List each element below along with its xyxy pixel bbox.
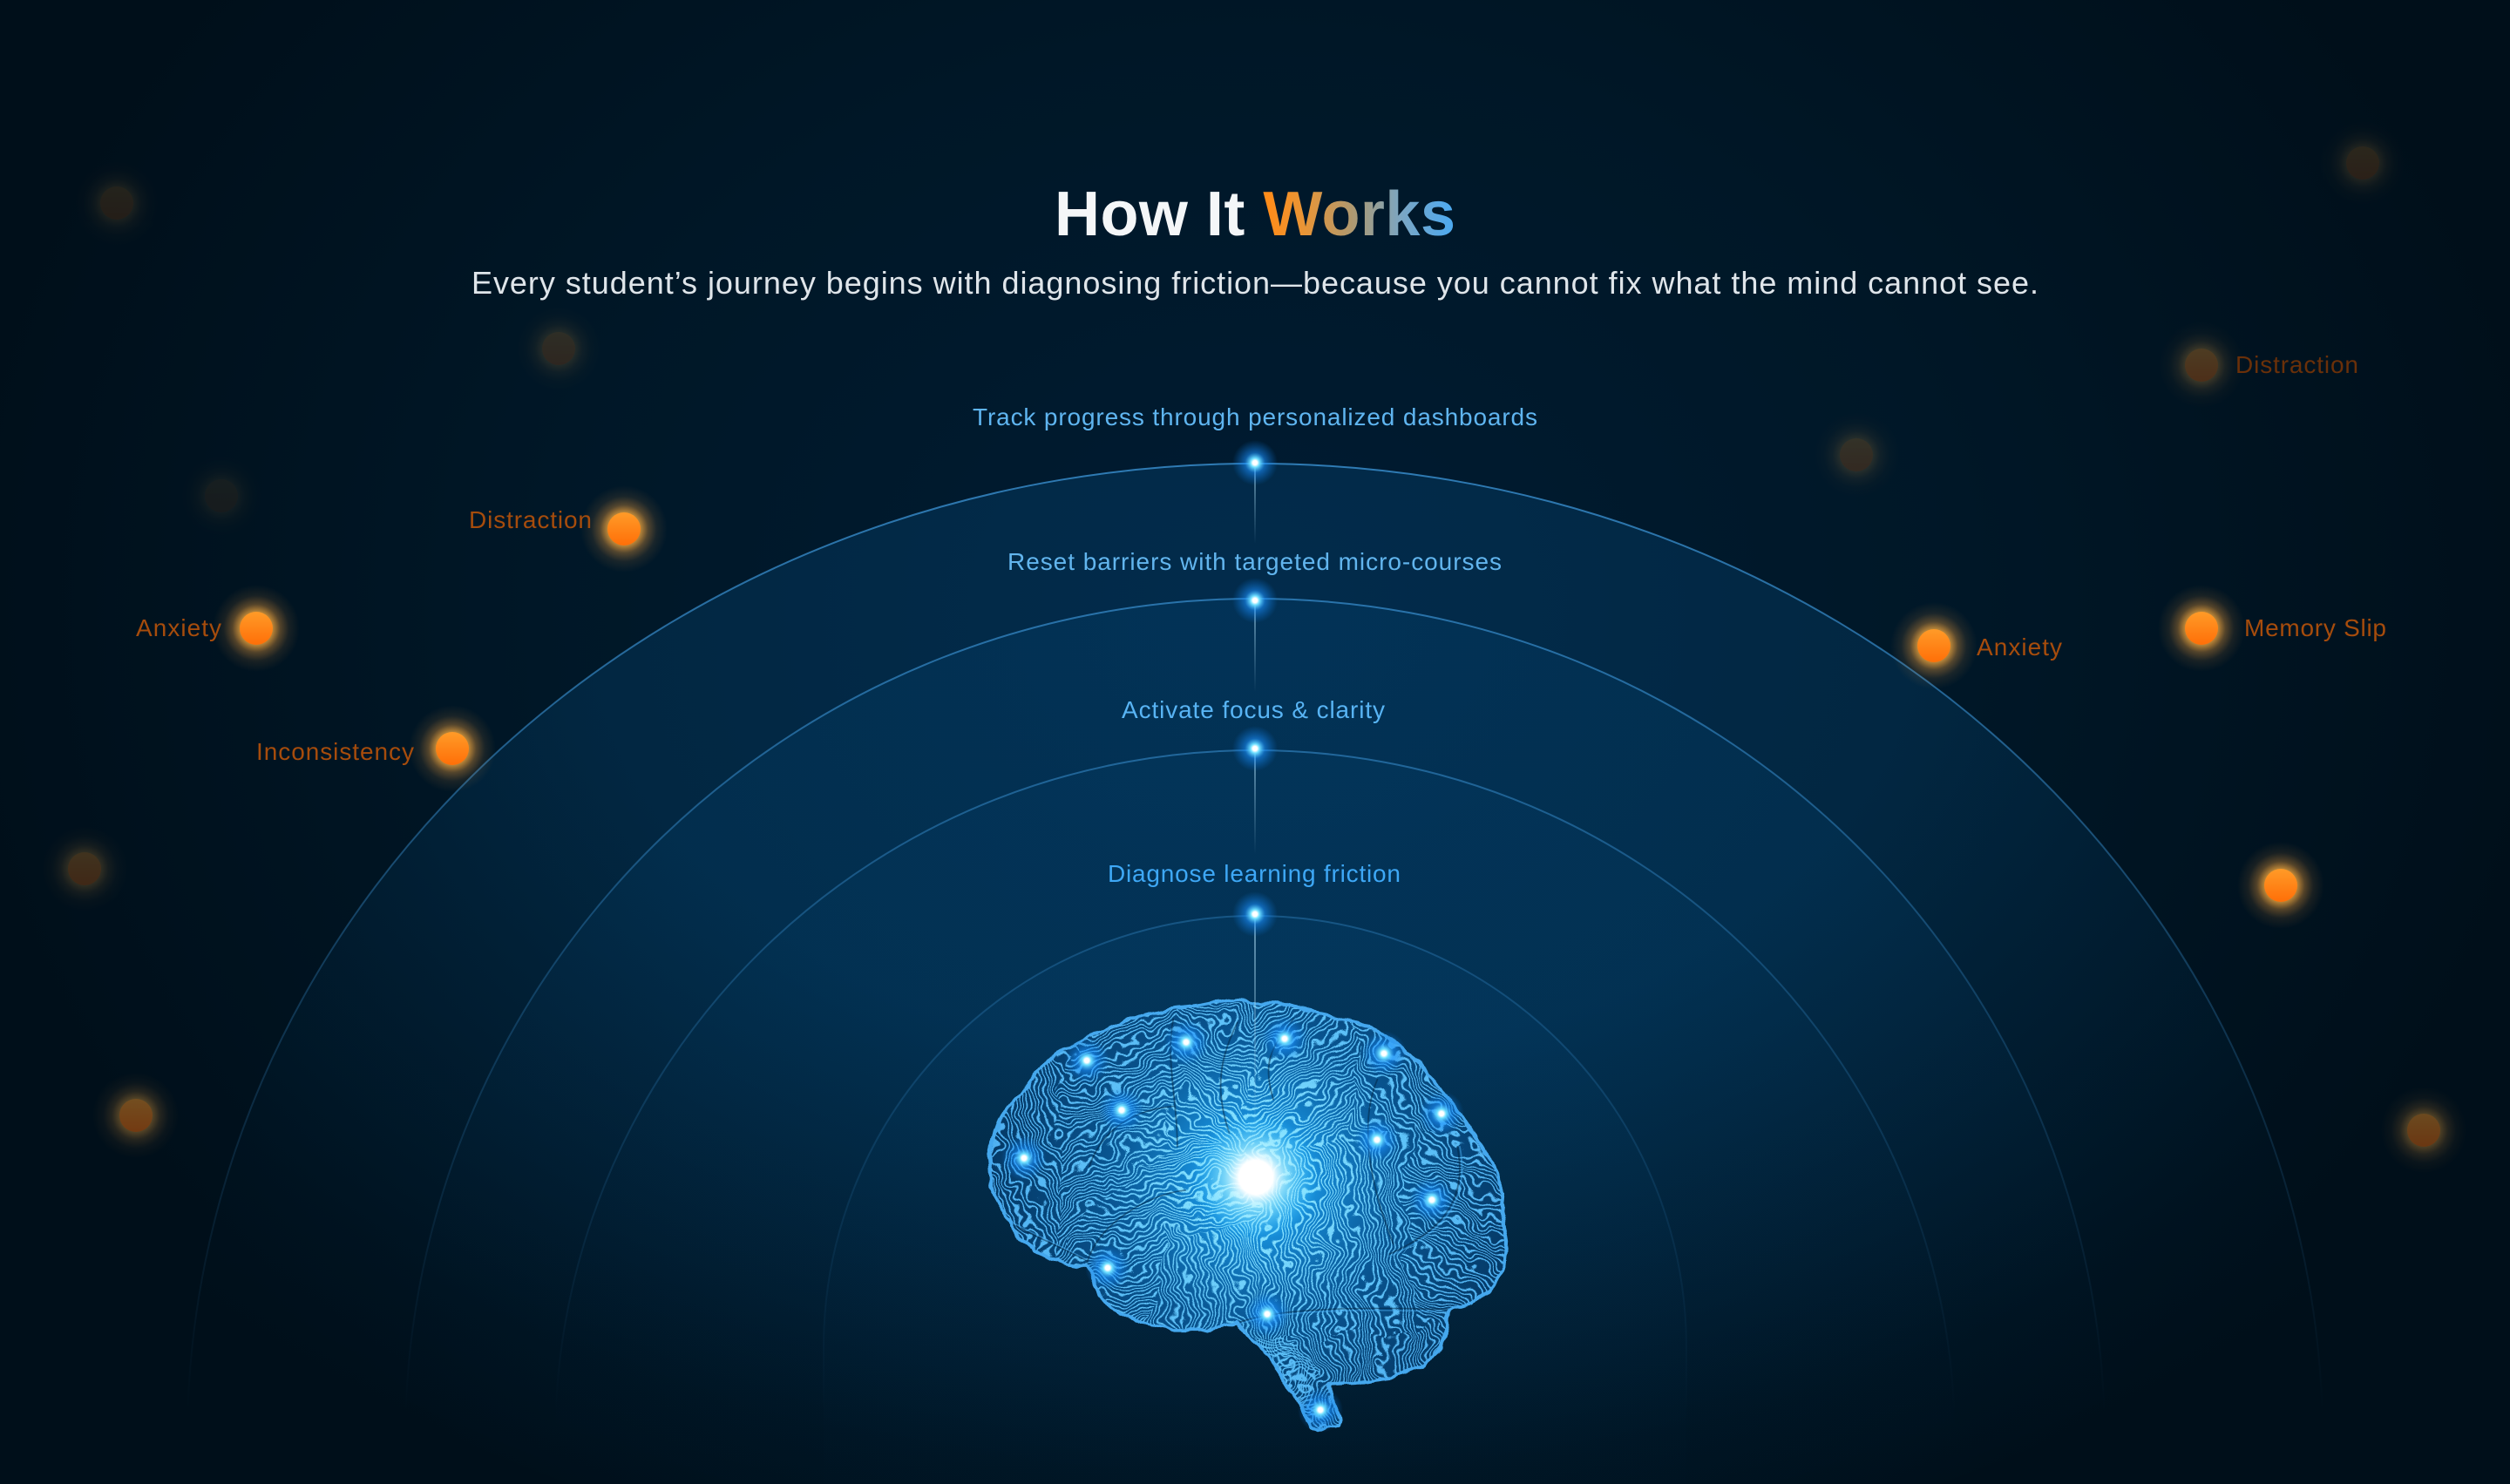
brain: line texture and glow — [991, 1000, 1505, 1429]
brain: glowing nodes — [1001, 1016, 1464, 1433]
arc: outer ring (dashboards) — [187, 464, 2323, 1484]
friction dot: Inconsistency: Inconsistency — [256, 738, 414, 765]
brain: bright core — [1193, 1115, 1319, 1240]
arc: ring (micro-courses) — [405, 599, 2105, 1484]
friction dot: Anxiety right — [1890, 602, 2062, 689]
arc: inner ring (diagnose) — [824, 916, 1686, 1484]
friction dot: Distraction left: Distraction — [469, 506, 592, 533]
brain illustration — [987, 998, 1509, 1433]
brain: rim — [989, 999, 1508, 1430]
connector: dashboards to micro-courses — [1254, 464, 1256, 544]
friction dot: Distraction left — [469, 485, 668, 573]
friction dot: Anxiety left — [136, 585, 300, 672]
friction dot: Inconsistency — [256, 705, 496, 792]
friction dot: faint left — [41, 825, 128, 912]
subtitle: Every student’s journey begins with diagnosing friction—because you cannot fix what the mind cannot see. — [471, 265, 2039, 301]
friction dot: unlabeled mid right — [2380, 1087, 2467, 1174]
friction dot: faint upper right — [1813, 411, 1900, 498]
step 2 node and label: Activate focus & clarity — [1122, 696, 1385, 723]
arc: ring (focus and clarity) — [555, 750, 1955, 1484]
friction dot: faint top right — [2319, 119, 2406, 207]
connector: micro-courses to focus — [1254, 600, 1256, 692]
connector lines — [1254, 464, 1256, 1143]
friction dot: faint top left — [73, 159, 160, 247]
friction dot: faint near subtitle — [515, 305, 602, 392]
step 4 node and label — [973, 403, 1537, 485]
title: How It Works — [1055, 180, 1455, 249]
step 4 node and label: Track progress through personalized dashboards — [973, 403, 1537, 430]
friction dot: Anxiety right: Anxiety — [1977, 634, 2062, 661]
step 3 node and label: Reset barriers with targeted micro-courses — [1007, 548, 1502, 575]
friction dot: unlabeled mid left — [92, 1072, 180, 1159]
step 2 node and label — [1122, 696, 1385, 771]
friction dot: Memory Slip: Memory Slip — [2244, 614, 2386, 641]
concentric arcs — [187, 464, 2323, 1484]
connector: diagnose to brain — [1254, 915, 1256, 1143]
friction dot: Memory Slip — [2158, 585, 2386, 672]
step 1 node and label — [1108, 860, 1401, 937]
friction dot: unlabeled bright right — [2237, 842, 2324, 929]
friction dot: Anxiety left: Anxiety — [136, 614, 221, 641]
friction dot: Distraction right (faded) — [2158, 322, 2358, 409]
friction dot: faint upper left — [178, 452, 265, 539]
step 3 node and label — [1007, 548, 1502, 623]
step 1 node and label: Diagnose learning friction — [1108, 860, 1401, 887]
connector: focus to diagnose — [1254, 749, 1256, 854]
friction dot: Distraction right (faded): Distraction — [2235, 351, 2358, 378]
